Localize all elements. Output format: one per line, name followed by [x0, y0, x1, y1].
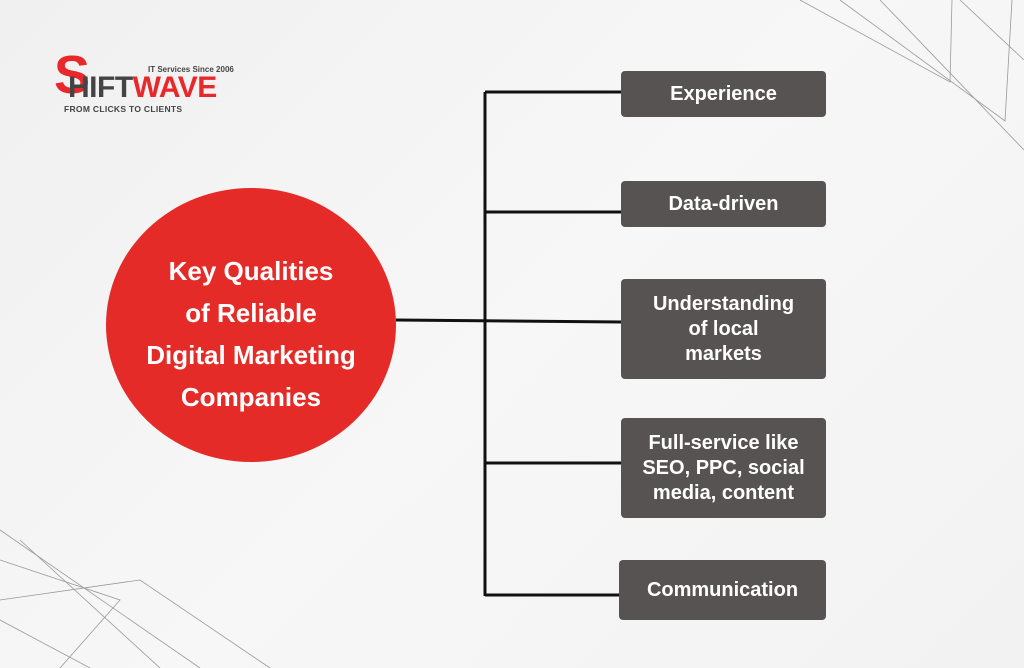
box: Communication: Communication: [647, 578, 798, 600]
box: Understanding: [621, 279, 826, 379]
box: Data-driven: Data-driven: [668, 192, 779, 214]
logo: FROM CLICKS TO CLIENTS: [64, 104, 182, 114]
logo: [54, 45, 234, 114]
box: Full-service: media, content: [653, 482, 794, 504]
logo: HIFTWAVE: [68, 71, 217, 104]
central circle: Companies: [181, 382, 321, 412]
box: Understanding: of local: [688, 318, 758, 340]
box: Data-driven: [621, 181, 826, 227]
box: Understanding: Understanding: [653, 292, 794, 314]
central circle: of Reliable: [185, 298, 317, 328]
central circle: Digital Marketing: [146, 340, 356, 370]
box: Full-service: SEO, PPC, social: [642, 456, 805, 478]
box: Experience: [621, 71, 826, 117]
logo: IT Services Since 2006: [148, 65, 234, 74]
box: Full-service: Full-service like: [648, 432, 799, 454]
central circle: Key Qualities: [169, 256, 333, 286]
box: Full-service: [621, 418, 826, 518]
box: Understanding: markets: [685, 342, 762, 364]
box: Communication: [619, 560, 826, 620]
central circle: [106, 188, 396, 462]
box: Experience: Experience: [670, 82, 777, 104]
logo: S: [54, 45, 90, 105]
